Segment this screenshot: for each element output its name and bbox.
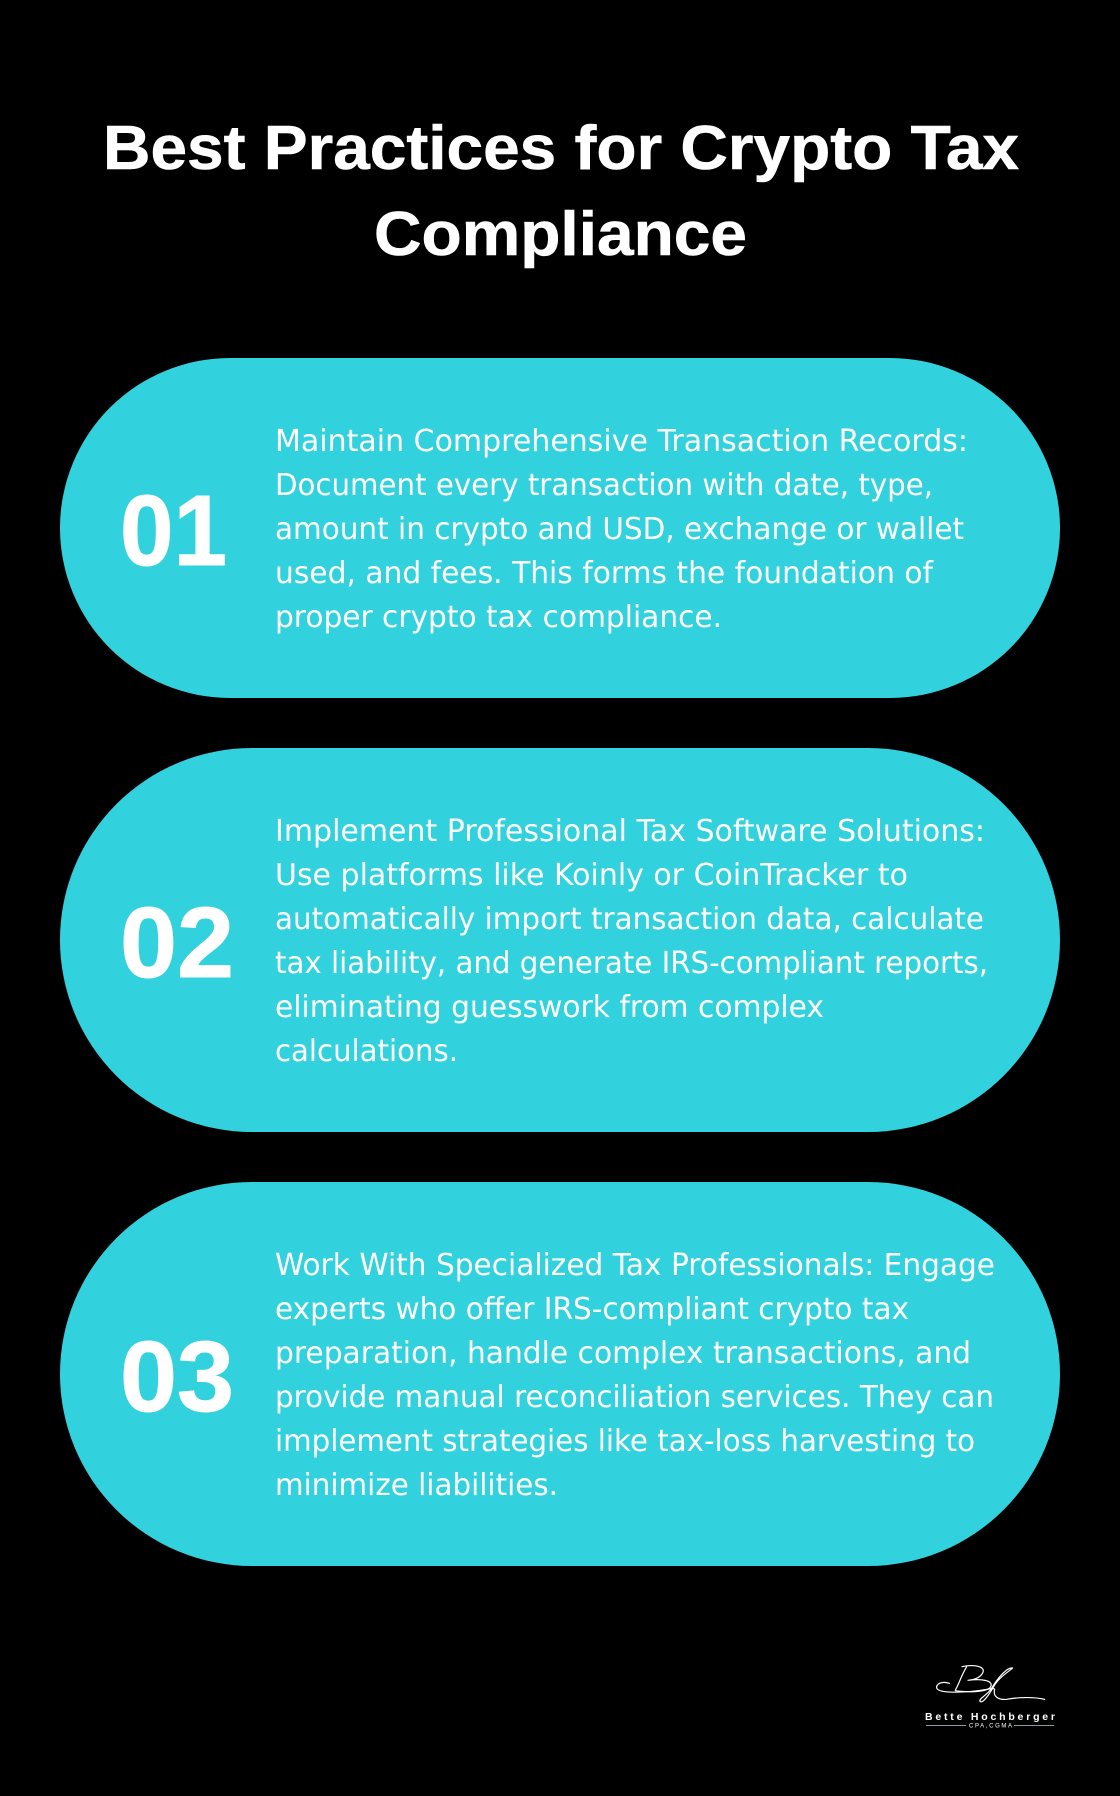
panel background 1 <box>60 358 1060 698</box>
text block 3: provide manual reconciliation services. They can <box>275 1380 994 1415</box>
text block 3: preparation, handle complex transactions, and <box>275 1336 971 1371</box>
text block 1: amount in crypto and USD, exchange or wallet <box>275 512 964 547</box>
text block 1 <box>275 424 968 635</box>
panel: step 3 professionals <box>60 1182 1060 1566</box>
text block 2: calculations. <box>275 1034 458 1069</box>
text block 3 <box>275 1248 995 1503</box>
panel background 2 <box>60 748 1060 1132</box>
text block 1: Document every transaction with date, type, <box>275 468 933 503</box>
text block 2: Implement Professional Tax Software Solutions: <box>275 814 985 849</box>
panel background 3 <box>60 1182 1060 1566</box>
number 01: 01 <box>120 475 227 587</box>
text block 2: tax liability, and generate IRS-compliant reports, <box>275 946 988 981</box>
panel: step 2 software <box>60 748 1060 1132</box>
text block 2: Use platforms like Koinly or CoinTracker to <box>275 858 908 893</box>
text block 3: minimize liabilities. <box>275 1468 558 1503</box>
text block 3: experts who offer IRS-compliant crypto tax <box>275 1292 909 1327</box>
number 03: 03 <box>120 1321 234 1433</box>
title <box>103 114 1020 269</box>
panel: step 1 records <box>60 358 1060 698</box>
text block 3: Work With Specialized Tax Professionals: Engage <box>275 1248 995 1283</box>
logo credentials: CPA,CGMA <box>969 1724 1012 1730</box>
title: Best Practices for Crypto Tax <box>103 114 1020 183</box>
icon: BH signature <box>937 1666 1045 1702</box>
logo name: Bette Hochberger <box>925 1711 1055 1723</box>
title: Compliance <box>374 200 747 269</box>
logo: Bette Hochberger signature <box>925 1666 1055 1730</box>
text block 3: implement strategies like tax-loss harvesting to <box>275 1424 975 1459</box>
text block 2 <box>275 814 988 1069</box>
text block 1: Maintain Comprehensive Transaction Records: <box>275 424 968 459</box>
number 02: 02 <box>120 887 234 999</box>
text block 1: used, and fees. This forms the foundation of <box>275 556 934 591</box>
text block 2: automatically import transaction data, calculate <box>275 902 984 937</box>
text block 1: proper crypto tax compliance. <box>275 600 722 635</box>
text block 2: eliminating guesswork from complex <box>275 990 824 1025</box>
